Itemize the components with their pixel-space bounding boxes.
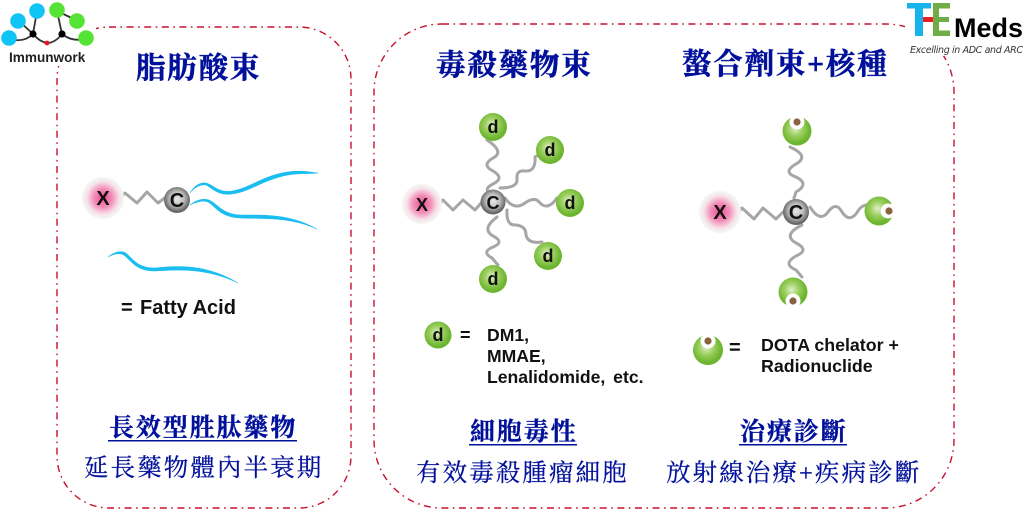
description: kills tumor cells: 有效毒殺腫瘤細胞: [416, 459, 629, 487]
logo: TFEmeds: [905, 0, 1024, 56]
description: half-life extension: 延長藥物體內半衰期: [84, 454, 323, 482]
diagram: cytotoxin conjugate: d: [564, 193, 576, 213]
diagram: chelator radionuclide conjugate: X: [713, 202, 727, 224]
diagram: chelator radionuclide conjugate: C: [789, 202, 803, 224]
diagram: cytotoxin conjugate: d: [544, 140, 556, 160]
logo: TFEmeds: Meds: [954, 13, 1023, 43]
legend: cytotoxic payloads: d: [432, 325, 444, 345]
description: radiotherapy and diagnosis: 放射線治療+疾病診斷: [666, 459, 921, 487]
diagram: cytotoxin conjugate: d: [488, 269, 498, 289]
legend: fatty acid: [108, 252, 238, 319]
caption: theranostics: 治療診斷: [740, 417, 848, 446]
diagram: cytotoxin conjugate: [402, 113, 584, 293]
diagram: cytotoxin conjugate: d: [542, 246, 554, 266]
diagram: chelator radionuclide conjugate: [699, 114, 896, 308]
diagram: fatty acid conjugate: C: [170, 190, 184, 212]
legend: fatty acid: Fatty Acid: [140, 297, 236, 319]
legend: DOTA chelator and radionuclide: =: [729, 337, 741, 359]
title: chelator bundle plus nuclide: 螯合劑束+核種: [682, 48, 888, 81]
panel: fatty acid bundle: [57, 27, 351, 508]
logo: Immunwork: [0, 0, 96, 66]
diagram: cytotoxin conjugate: d: [488, 117, 498, 137]
title: cytotoxin bundle: 毒殺藥物束: [436, 49, 593, 82]
caption: long acting peptide drugs: 長效型胜肽藥物: [109, 413, 297, 442]
legend: cytotoxic payloads: Lenalidomide, etc.: [487, 367, 644, 387]
diagram: cytotoxin conjugate: X: [416, 195, 428, 215]
logo: TFEmeds: Excelling in ADC and ARC: [910, 45, 1023, 56]
diagram: cytotoxin conjugate: C: [486, 193, 500, 213]
legend: DOTA chelator and radionuclide: DOTA chelator +: [761, 335, 899, 355]
diagram: fatty acid conjugate: [82, 171, 318, 229]
legend: cytotoxic payloads: DM1,: [487, 325, 529, 345]
legend: DOTA chelator and radionuclide: [693, 334, 899, 376]
title: fatty acid bundle: 脂肪酸束: [136, 52, 261, 85]
logo: Immunwork: Immunwork: [9, 50, 86, 65]
legend: cytotoxic payloads: =: [460, 325, 471, 345]
panel: cytotoxic and chelator bundles: [374, 24, 954, 508]
diagram: fatty acid conjugate: X: [96, 188, 110, 210]
legend: fatty acid: =: [121, 297, 133, 319]
legend: cytotoxic payloads: MMAE,: [487, 346, 546, 366]
caption: cytotoxicity: 細胞毒性: [470, 417, 578, 446]
legend: cytotoxic payloads: [424, 322, 644, 387]
legend: DOTA chelator and radionuclide: Radionuclide: [761, 356, 873, 376]
